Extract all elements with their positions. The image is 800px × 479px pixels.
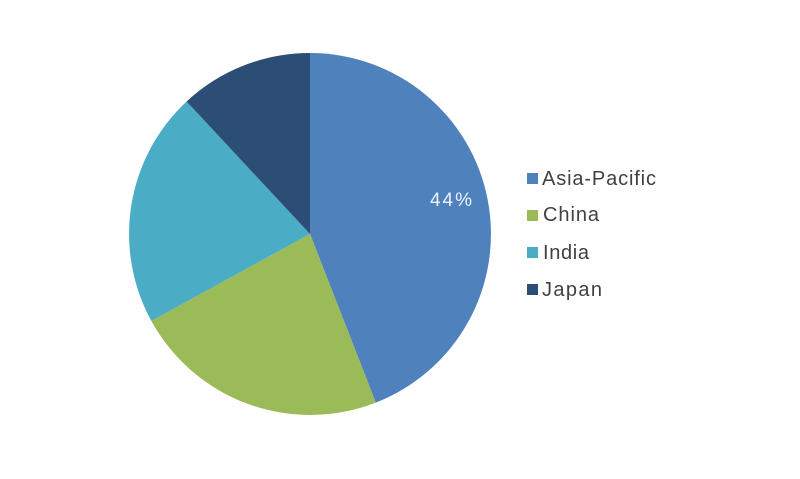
- slice: Japan: [187, 53, 310, 234]
- slice: China: [151, 234, 376, 415]
- slice: India: [129, 102, 310, 321]
- pie chart: [129, 53, 491, 415]
- legend item: Japan: Japan: [542, 279, 602, 301]
- legend item: China: China: [543, 204, 600, 226]
- slice: Asia-Pacific: [310, 53, 491, 403]
- data label: 44%: 44%: [430, 190, 472, 211]
- legend item: Asia-Pacific: Asia-Pacific: [542, 168, 656, 190]
- legend: [527, 168, 656, 301]
- legend item: India: India: [543, 242, 590, 264]
